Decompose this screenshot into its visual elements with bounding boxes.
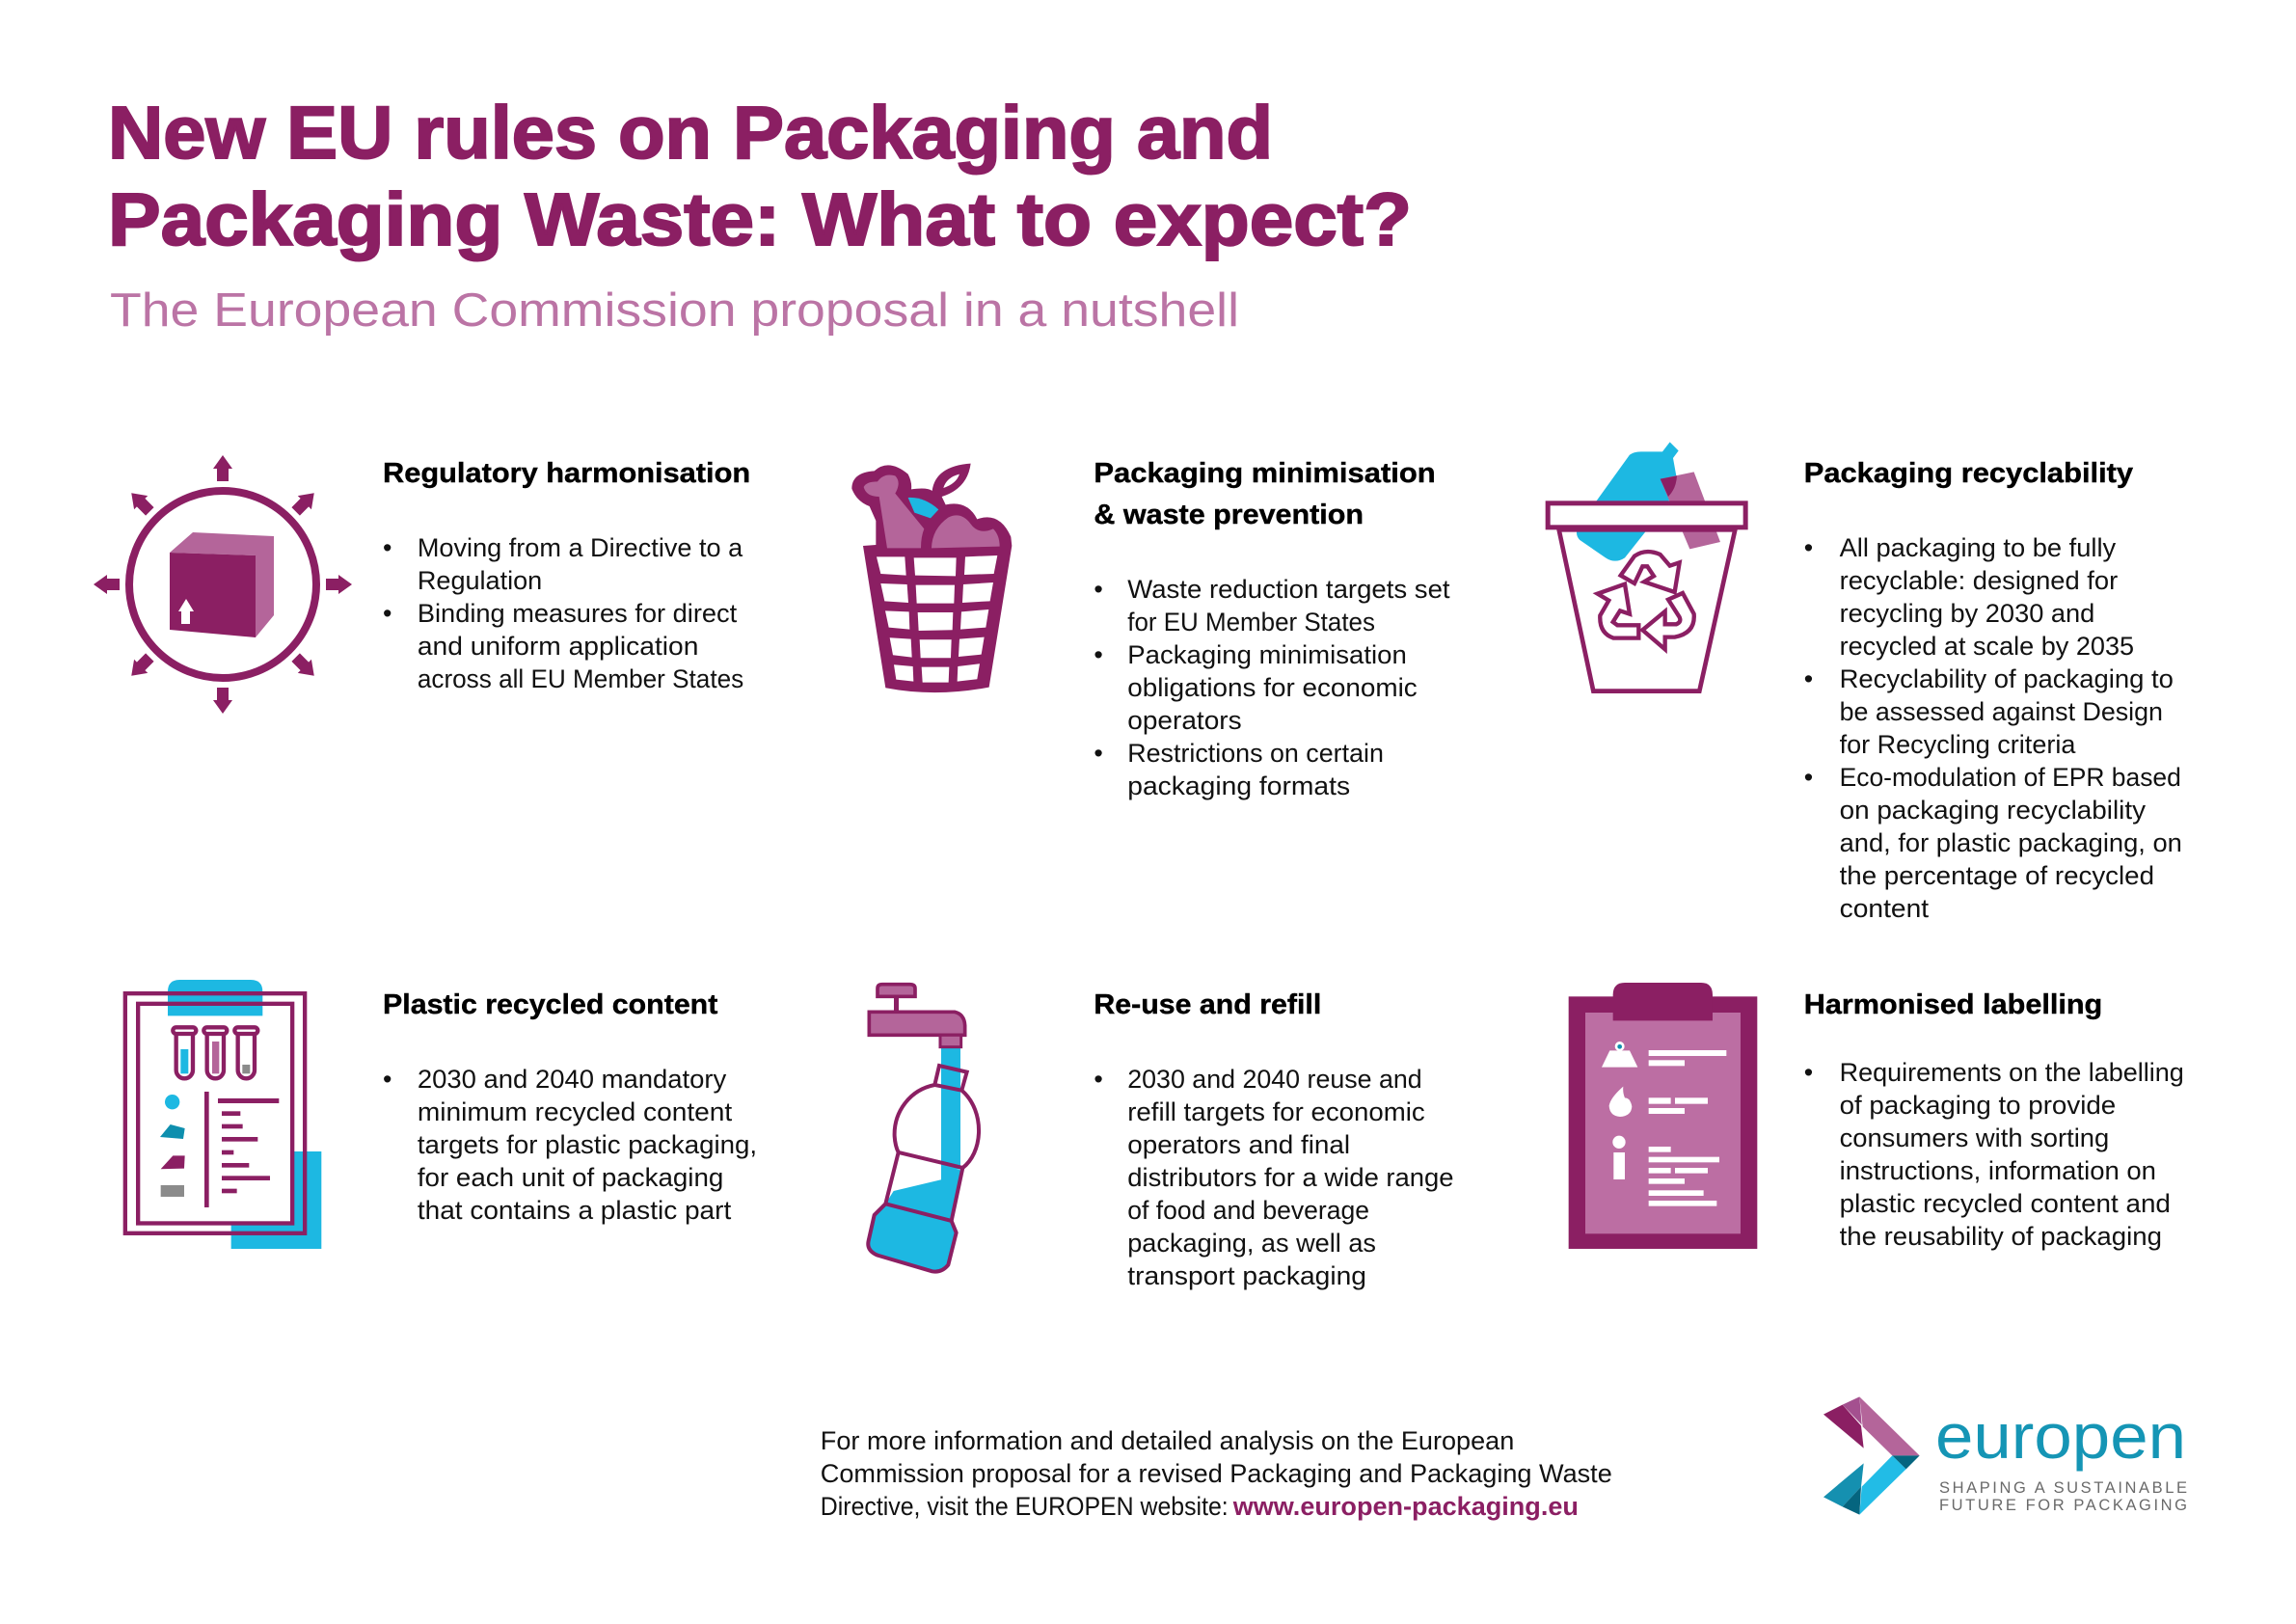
panel: plastic recycled content: [125, 980, 757, 1249]
bullet list: distributors for a wide range: [1127, 1163, 1454, 1192]
icon: lab clipboard with test tubes: [125, 980, 321, 1249]
bullet list: •: [1094, 640, 1103, 669]
bullet list: the reusability of packaging: [1840, 1222, 2162, 1251]
bullet list: Packaging minimisation: [1127, 640, 1407, 669]
bullet list: 2030 and 2040 reuse and: [1127, 1065, 1422, 1094]
title: New EU rules on Packaging and: [108, 92, 1273, 175]
heading: [1094, 458, 1436, 530]
bullet list: the percentage of recycled: [1840, 861, 2154, 890]
bullet list: operators: [1127, 706, 1242, 735]
heading: & waste prevention: [1094, 500, 1364, 530]
subtitle: The European Commission proposal in a nutshell: [110, 284, 1239, 337]
bullet list: •: [1804, 664, 1813, 693]
bullet list: packaging formats: [1127, 771, 1350, 800]
panel: regulatory harmonisation: [94, 455, 750, 714]
bullet list: content: [1840, 894, 1930, 923]
bullet list: [383, 1065, 757, 1225]
heading: Plastic recycled content: [383, 989, 718, 1020]
icon: waste basket: [851, 464, 1012, 692]
bullet list: plastic recycled content and: [1840, 1189, 2171, 1218]
bullet list: •: [1804, 533, 1813, 562]
bullet list: consumers with sorting: [1840, 1123, 2109, 1152]
bullet list: Requirements on the labelling: [1840, 1058, 2184, 1087]
bullet list: •: [1804, 1058, 1813, 1087]
bullet list: of food and beverage: [1127, 1196, 1369, 1225]
bullet list: packaging, as well as: [1127, 1229, 1376, 1258]
footer note: For more information and detailed analysis on the European: [821, 1426, 1514, 1455]
bullet list: [1094, 575, 1450, 800]
bullet list: [1804, 1058, 2184, 1251]
bullet list: on packaging recyclability: [1840, 796, 2147, 825]
bullet list: Binding measures for direct: [418, 599, 738, 628]
bullet list: minimum recycled content: [418, 1097, 733, 1126]
title: Packaging Waste: What to expect?: [108, 178, 1412, 261]
title: [108, 92, 1412, 261]
bullet list: and, for plastic packaging, on: [1840, 828, 2182, 857]
heading: Harmonised labelling: [1804, 989, 2102, 1020]
footer note: www.europen-packaging.eu: [1232, 1492, 1579, 1521]
bullet list: •: [383, 1065, 392, 1094]
bullet list: instructions, information on: [1840, 1156, 2156, 1185]
bullet list: for Recycling criteria: [1840, 730, 2075, 759]
bullet list: for EU Member States: [1127, 608, 1375, 636]
footer note: Commission proposal for a revised Packaging and Packaging Waste: [821, 1459, 1612, 1488]
panel: packaging minimisation: [851, 458, 1450, 800]
icon: tap filling bottle: [868, 985, 979, 1272]
heading: Packaging recyclability: [1804, 458, 2133, 489]
bullet list: and uniform application: [418, 632, 698, 661]
bullet list: •: [383, 533, 392, 562]
panel: harmonised labelling: [1569, 983, 2184, 1251]
logo: europen: [1823, 1396, 2187, 1515]
heading: Regulatory harmonisation: [383, 458, 750, 489]
footer note: [821, 1426, 1612, 1521]
tagline: [1939, 1479, 2187, 1514]
bullet list: recycling by 2030 and: [1840, 599, 2094, 628]
panel: re-use and refill: [868, 985, 1454, 1290]
bullet list: obligations for economic: [1127, 673, 1418, 702]
panel: packaging recyclability: [1548, 442, 2182, 923]
bullet list: recycled at scale by 2035: [1840, 632, 2134, 661]
bullet list: across all EU Member States: [418, 664, 743, 693]
bullet list: recyclable: designed for: [1840, 566, 2118, 595]
bullet list: Eco-modulation of EPR based: [1840, 763, 2181, 792]
bullet list: Waste reduction targets set: [1127, 575, 1450, 604]
wordmark: europen: [1935, 1400, 2186, 1472]
bullet list: •: [1094, 575, 1103, 604]
bullet list: be assessed against Design: [1840, 697, 2163, 726]
icon: box with outward arrows: [94, 455, 352, 714]
bullet list: Recyclability of packaging to: [1840, 664, 2174, 693]
bullet list: •: [1094, 1065, 1103, 1094]
bullet list: of packaging to provide: [1840, 1091, 2116, 1120]
bullet list: Moving from a Directive to a: [418, 533, 743, 562]
bullet list: •: [383, 599, 392, 628]
bullet list: that contains a plastic part: [418, 1196, 732, 1225]
heading: Packaging minimisation: [1094, 458, 1436, 489]
bullet list: [1094, 1065, 1454, 1290]
bullet list: [383, 533, 743, 693]
bullet list: All packaging to be fully: [1840, 533, 2117, 562]
bullet list: for each unit of packaging: [418, 1163, 723, 1192]
heading: Re-use and refill: [1094, 989, 1321, 1020]
bullet list: Regulation: [418, 566, 542, 595]
bullet list: [1804, 533, 2182, 923]
tagline: SHAPING A SUSTAINABLE: [1939, 1479, 2187, 1497]
icon: recycling bin with bottle: [1548, 442, 1745, 691]
bullet list: 2030 and 2040 mandatory: [418, 1065, 727, 1094]
bullet list: operators and final: [1127, 1130, 1350, 1159]
logo mark: [1823, 1396, 1920, 1515]
tagline: FUTURE FOR PACKAGING: [1939, 1497, 2187, 1514]
bullet list: refill targets for economic: [1127, 1097, 1425, 1126]
bullet list: •: [1094, 739, 1103, 768]
footer note: Directive, visit the EUROPEN website:: [821, 1492, 1229, 1521]
bullet list: transport packaging: [1127, 1261, 1366, 1290]
bullet list: •: [1804, 763, 1813, 792]
bullet list: targets for plastic packaging,: [418, 1130, 757, 1159]
bullet list: Restrictions on certain: [1127, 739, 1384, 768]
icon: label clipboard: [1569, 983, 1757, 1249]
